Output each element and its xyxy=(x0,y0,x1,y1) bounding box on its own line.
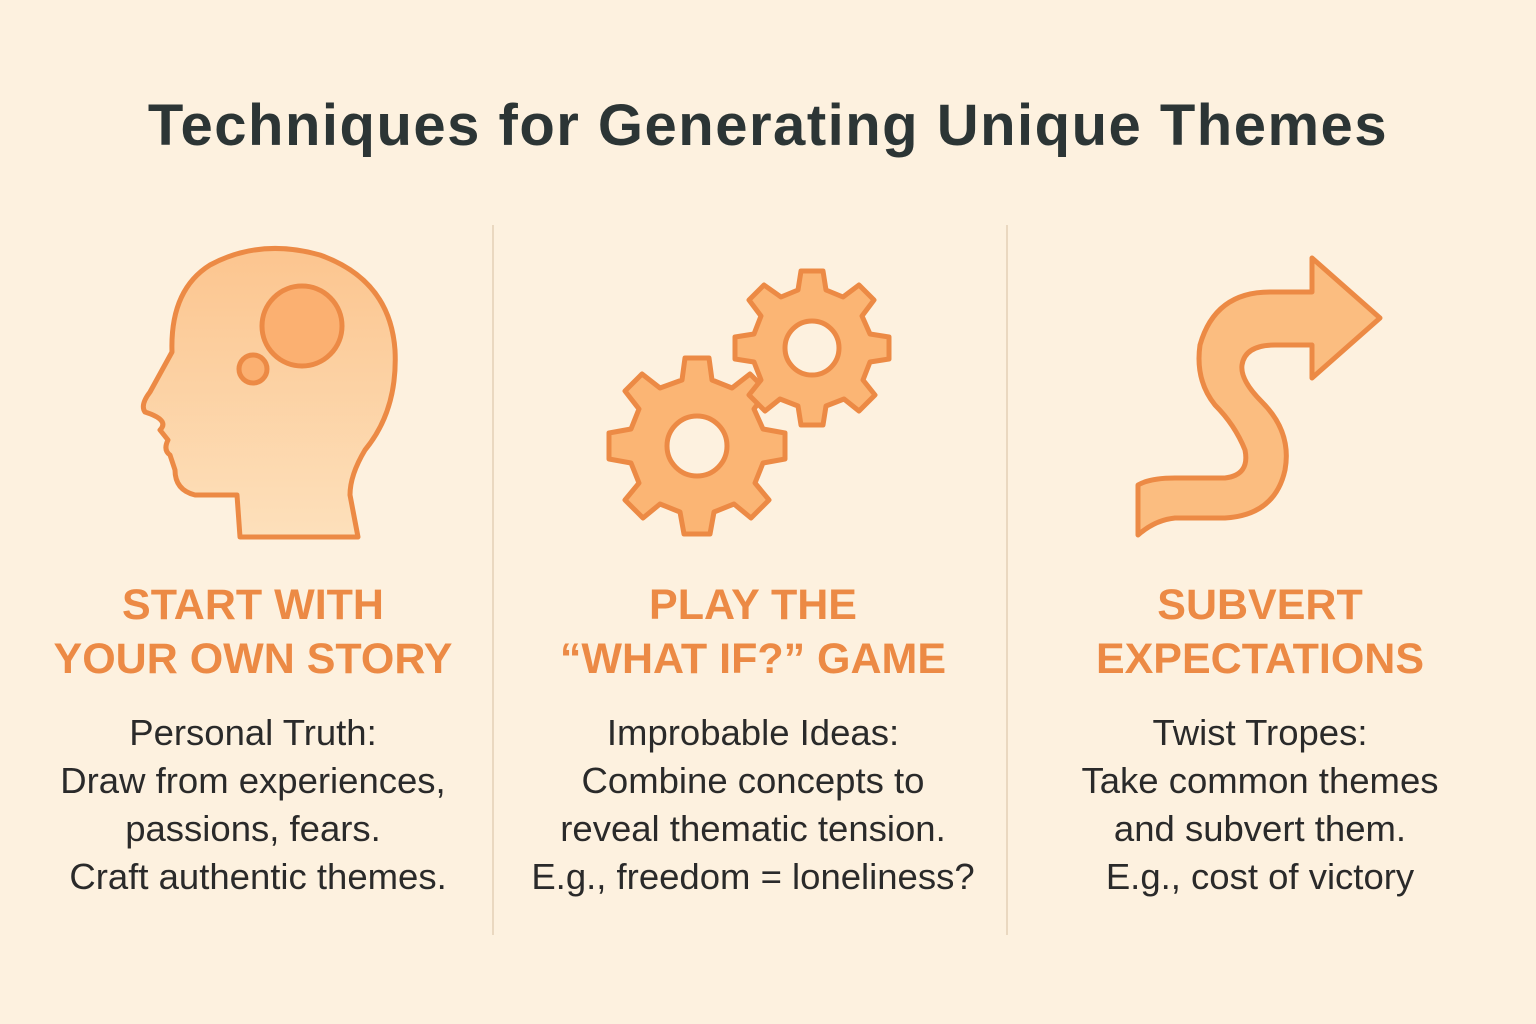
body 3: and subvert them. xyxy=(1114,808,1406,849)
body 1: Craft authentic themes. xyxy=(69,856,447,897)
heading 3 xyxy=(1096,581,1424,683)
body 1 xyxy=(60,712,447,897)
body 3: E.g., cost of victory xyxy=(1106,856,1414,897)
heading 1: YOUR OWN STORY xyxy=(54,635,452,683)
heading 1 xyxy=(54,581,452,683)
body 3 xyxy=(1081,712,1439,897)
body 3: Twist Tropes: xyxy=(1152,712,1368,753)
icon: twisting arrow xyxy=(1138,258,1380,535)
column 2 text xyxy=(531,581,975,897)
column 1 text xyxy=(54,581,452,897)
body 1: passions, fears. xyxy=(125,808,381,849)
body 1: Personal Truth: xyxy=(129,712,377,753)
icon: head xyxy=(143,248,395,537)
title: Techniques for Generating Unique Themes xyxy=(148,93,1388,158)
body 2: Improbable Ideas: xyxy=(607,712,899,753)
heading 2: “WHAT IF?” GAME xyxy=(560,635,946,683)
body 2 xyxy=(531,712,975,897)
body 2: reveal thematic tension. xyxy=(560,808,946,849)
heading 2: PLAY THE xyxy=(649,581,857,629)
icon: gears xyxy=(609,271,889,534)
heading 3: SUBVERT xyxy=(1157,581,1363,629)
heading 1: START WITH xyxy=(122,581,384,629)
body 3: Take common themes xyxy=(1081,760,1439,801)
heading 2 xyxy=(560,581,946,683)
body 2: E.g., freedom = loneliness? xyxy=(531,856,975,897)
body 1: Draw from experiences, xyxy=(60,760,446,801)
column 3 text xyxy=(1081,581,1439,897)
heading 3: EXPECTATIONS xyxy=(1096,635,1424,683)
body 2: Combine concepts to xyxy=(582,760,924,801)
